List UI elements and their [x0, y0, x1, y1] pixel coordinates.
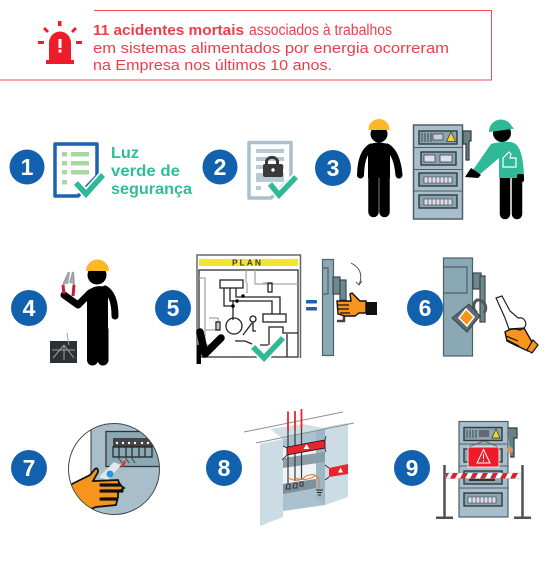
icon: tool box [50, 333, 77, 363]
number badge 4: 4 [23, 295, 36, 321]
number badge 8 [206, 450, 242, 486]
text: banner message: em sistemas alimentados por energia ocorreram [93, 40, 449, 57]
text: Luz verde de segurança: Luz [111, 145, 139, 162]
callout: fatal accidents banner [0, 10, 492, 80]
text: PLAN: PLAN [232, 258, 262, 268]
number badge 1 [10, 150, 44, 184]
icon: worker with pliers [63, 260, 115, 360]
icon: hand with voltage tester, magnified circle [68, 423, 160, 515]
text: banner message: na Empresa nos últimos 10 anos. [93, 57, 332, 74]
text: Luz verde de segurança: segurança [111, 181, 192, 198]
number badge 3: 3 [327, 155, 339, 181]
step 1: green light document [10, 144, 192, 198]
step 6: lock and key [407, 258, 538, 356]
text: banner message: 11 acidentes mortais [93, 22, 244, 39]
step 8: grounding and barriers [206, 409, 354, 526]
icon: grounded switchgear cubicle [244, 409, 354, 526]
number badge 2: 2 [214, 154, 226, 180]
step 5: plan and switch off [155, 255, 377, 364]
icon: equals sign [306, 300, 317, 310]
icon: worker with yellow helmet [360, 120, 399, 212]
number badge 9: 9 [406, 455, 418, 481]
step 3: workers at the panel [315, 120, 524, 219]
text: banner message [93, 22, 449, 74]
icon: hand turning switch off [322, 260, 377, 356]
text: banner message: associados à trabalhos [249, 22, 392, 39]
step 2: locked permit document [202, 142, 296, 198]
number badge 3 [315, 150, 351, 186]
icon: worker with green helmet [465, 121, 524, 214]
icon: alarm siren [38, 21, 82, 64]
text: Luz verde de segurança: verde de [111, 163, 180, 180]
icon: barrier posts and striped tape [436, 465, 531, 519]
step 7: voltage test [11, 420, 163, 520]
step 9: barrier and warning sign [394, 422, 531, 519]
number badge 5 [155, 290, 191, 326]
icon: hand holding key [496, 296, 538, 353]
number badge 1: 1 [21, 154, 34, 180]
icon: checklist document [55, 144, 103, 196]
number badge 6: 6 [419, 295, 431, 321]
icon: locked panel with warning [459, 422, 517, 517]
number badge 7: 7 [23, 455, 35, 481]
number badge 8: 8 [218, 455, 231, 481]
icon: document with padlock [249, 142, 296, 198]
text: Luz verde de segurança [111, 145, 192, 198]
icon: electrical panel [413, 125, 471, 219]
icon: electrical plan [197, 255, 300, 364]
number badge 5: 5 [167, 295, 180, 321]
step 4: worker with pliers [11, 260, 115, 363]
icon: panel switch with padlock [443, 258, 486, 356]
number badge 7 [11, 450, 47, 486]
